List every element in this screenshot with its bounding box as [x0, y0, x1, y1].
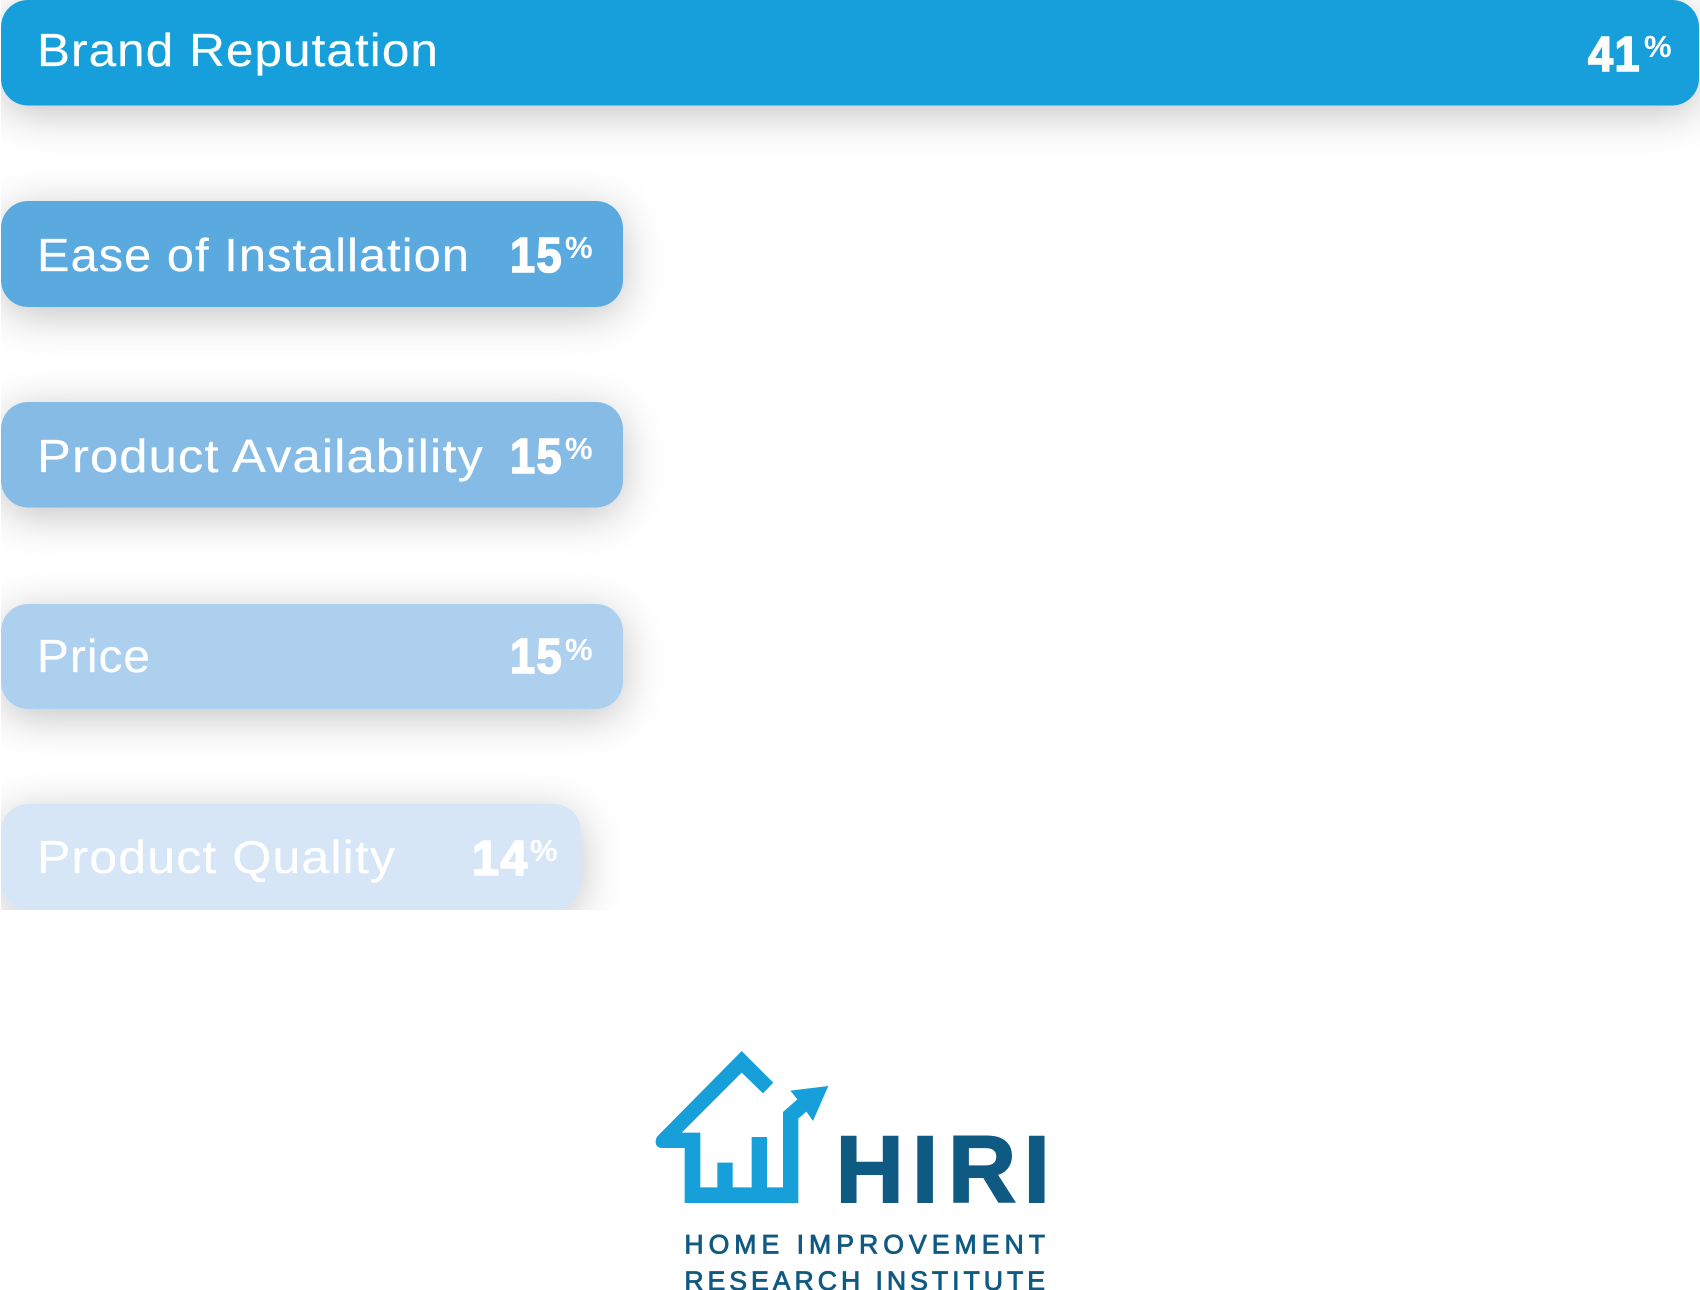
value: 15%: 15: [510, 630, 563, 684]
value: 15%: %: [565, 632, 593, 667]
label: Product Quality: Product Quality: [37, 831, 396, 883]
icon: house with rising bar chart and arrow: [656, 1051, 828, 1203]
wordmark: HIRI: HIRI: [836, 1117, 1050, 1222]
value: 14%: %: [530, 833, 558, 868]
label: Price: Price: [37, 630, 151, 682]
bar: Product Quality 14%: [1, 804, 581, 910]
value: 15%: 15: [510, 430, 563, 484]
tagline line 1: HOME IMPROVEMENT: [684, 1229, 1045, 1259]
label: Brand Reputation: Brand Reputation: [37, 24, 439, 76]
label: Product Availability: Product Availability: [37, 430, 484, 482]
value: 15%: %: [565, 431, 593, 466]
value: 15%: 15: [510, 229, 563, 283]
value: 15%: %: [565, 230, 593, 265]
bar: Price 15%: [1, 604, 623, 709]
bar: Ease of Installation 15%: [1, 201, 623, 307]
logo: HIRI Home Improvement Research Institute: [656, 1051, 1050, 1290]
value: 41%: 41: [1588, 28, 1641, 82]
value: 14%: 14: [472, 832, 529, 886]
bar chart: [1, 0, 1699, 910]
bar: Brand Reputation 41%: [1, 0, 1699, 106]
value: 41%: %: [1644, 29, 1672, 64]
label: Ease of Installation: Ease of Installation: [37, 229, 470, 281]
bar: Product Availability 15%: [1, 402, 623, 508]
